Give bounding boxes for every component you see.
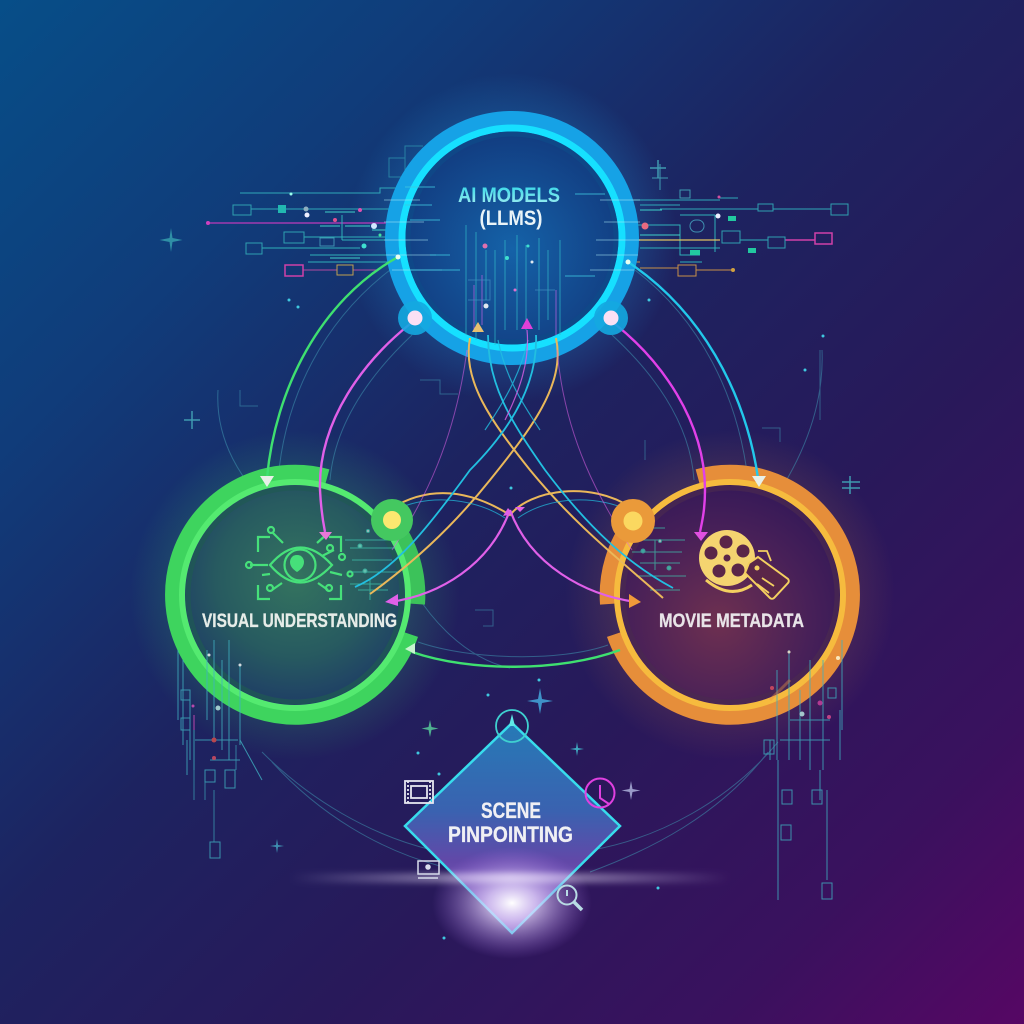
arrow: AI models to visual understanding (magenta) [319,324,410,540]
label: scene pinpointing [448,798,573,847]
circuit streaks over ring [384,200,640,270]
connector nodes [371,254,655,543]
circuit traces: upper left [208,146,467,276]
icon: eye with circuit nodes [246,527,352,599]
title: AI models: AI MODELS [458,184,560,207]
label: visual understanding: VISUAL UNDERSTANDING [202,611,397,632]
circuit traces inside green ring [345,530,400,600]
faint background arcs [218,270,822,872]
circuit nodes: upper right [584,196,756,272]
icon: film strip [405,781,433,803]
ring glows [130,73,895,760]
arrow: AI models to movie metadata (magenta) [615,324,708,541]
icon: video frame [418,861,439,878]
arrow: movie metadata to visual understanding [405,643,620,667]
arrows: gold crossing curves [370,338,663,598]
circuit inside AI ring [405,187,605,345]
bottom light glow [290,847,730,959]
title: AI models [458,184,560,230]
circuit traces inside orange ring [632,528,686,590]
label: movie metadata: MOVIE METADATA [659,611,804,632]
arrowheads: crossing curves [385,318,641,608]
title: AI models: (LLMS) [480,207,542,230]
icon: magnifier with clock [558,886,582,910]
label: scene pinpointing: PINPOINTING [448,822,573,847]
icon: target circle at diamond top [496,710,528,742]
icon: film reel with tag [699,530,789,599]
circuit block: lower left [178,640,262,858]
circuit nodes: upper left [206,192,434,262]
icon: magenta clock [586,778,614,808]
panel: AI models ring [384,120,640,356]
panel: scene pinpointing diamond [290,723,730,959]
arrows: magenta crossing curves [390,330,636,602]
circuit traces: upper right [556,164,848,276]
label: scene pinpointing: SCENE [481,798,541,823]
arrow: AI models to movie metadata [628,262,766,487]
panel: movie metadata ring [609,474,851,716]
circuit block: lower right [764,640,842,900]
arrow: AI models to visual understanding [260,257,398,487]
sparkles and floating dots [160,160,860,940]
panel: visual understanding ring [174,474,416,716]
arrows: cyan crossing curves [355,335,673,588]
